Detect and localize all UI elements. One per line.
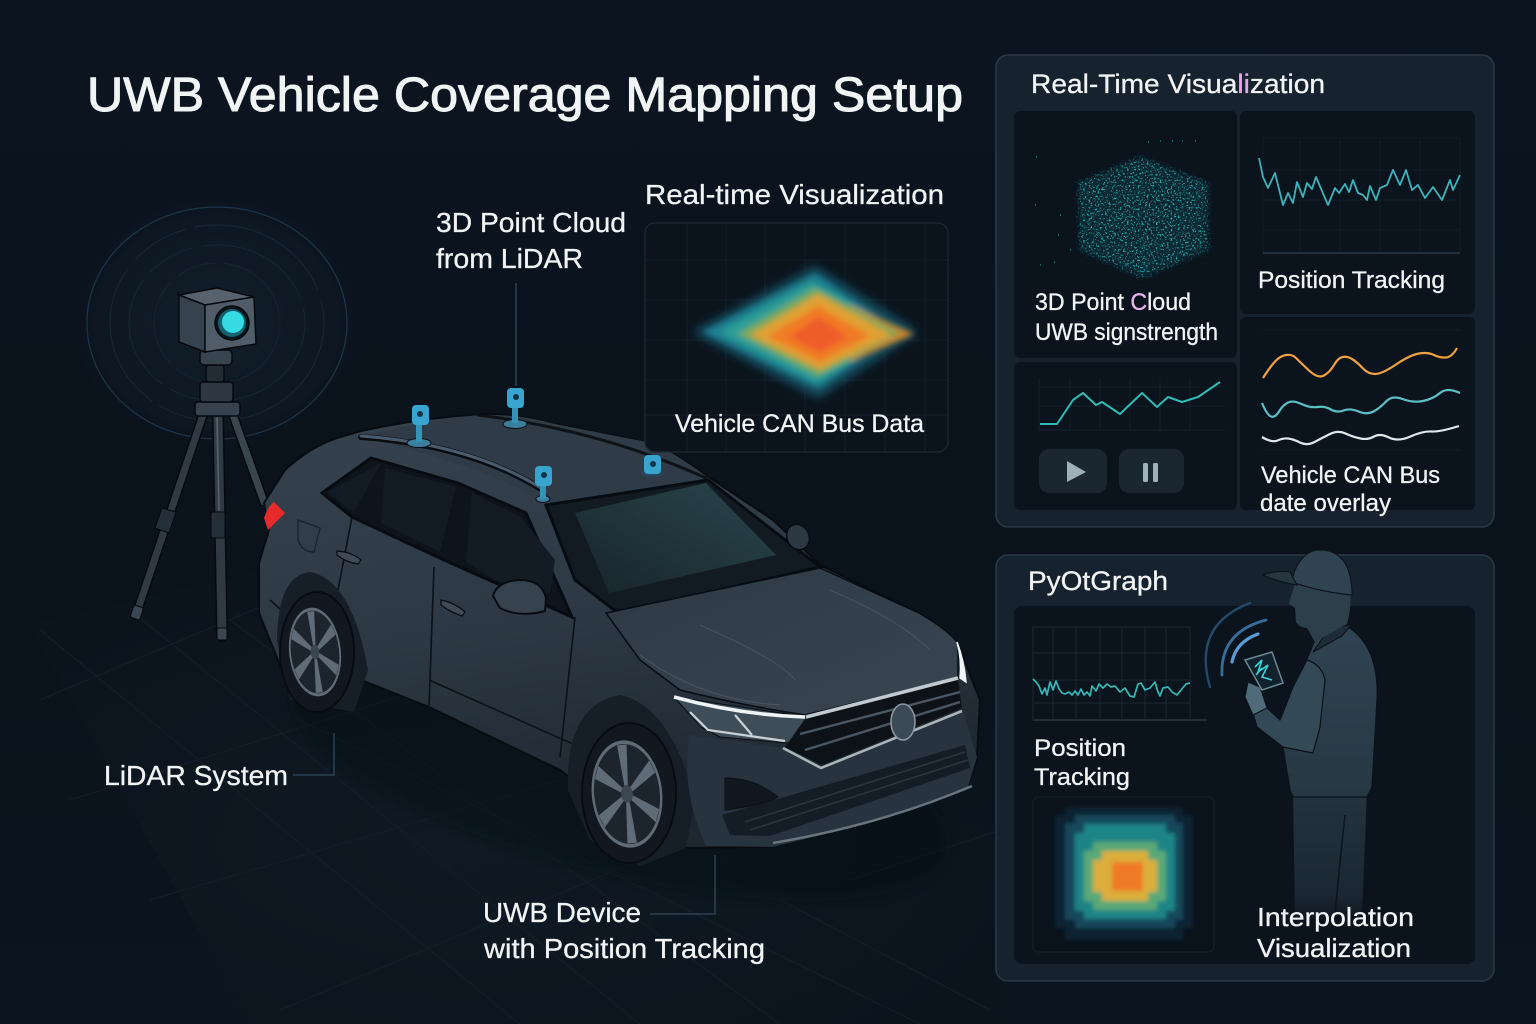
- hood creases: [640, 590, 930, 705]
- diamond heatmap: [692, 266, 918, 398]
- panel: vehicle CAN bus heatmap: [645, 223, 948, 452]
- front wheel: [568, 695, 695, 866]
- hood edge highlight: [957, 642, 966, 682]
- rear wheel: [277, 572, 368, 712]
- panel: PyOtGraph: [996, 550, 1494, 981]
- interpolation heatmap: [1033, 797, 1214, 952]
- inner panel: [1014, 606, 1475, 964]
- label: UWB device: [483, 897, 765, 964]
- position tracking caption: [1034, 735, 1130, 791]
- label: real-time visualization: Real-time Visualization: [645, 179, 944, 210]
- legs: [1293, 790, 1367, 920]
- label: 3D point cloud from LiDAR: from LiDAR: [436, 243, 583, 274]
- lower grille: [722, 745, 970, 836]
- phone: [1245, 652, 1283, 690]
- orange trace: [1263, 348, 1457, 378]
- position chart: [1033, 627, 1207, 720]
- head: [1289, 583, 1351, 642]
- overlay caption: Vehicle CAN Bus: [1261, 462, 1440, 489]
- door lines and sills: [270, 517, 575, 757]
- hand: [1245, 682, 1267, 715]
- panel caption: Vehicle CAN Bus Data: [675, 410, 924, 438]
- label: UWB device: with Position Tracking: [483, 933, 765, 964]
- panel background: [996, 555, 1494, 981]
- cell: position tracking: [1240, 111, 1475, 314]
- title: UWB Vehicle Coverage Mapping Setup: [87, 69, 963, 122]
- lower grille slats: [745, 752, 968, 830]
- cap brim: [1263, 571, 1297, 585]
- windshield reflection: [575, 483, 776, 593]
- sensor: front right: [641, 455, 663, 476]
- cap: [1292, 550, 1352, 595]
- leader line: LiDAR system: [293, 733, 334, 775]
- hood: [606, 568, 958, 715]
- roof: [361, 415, 708, 505]
- tail light: [264, 502, 285, 530]
- floor grid: [30, 570, 1010, 1024]
- white trace: [1262, 426, 1459, 444]
- signal arcs: [1206, 603, 1266, 687]
- interpolation caption: Interpolation: [1257, 902, 1414, 932]
- leader line: UWB device: [650, 855, 715, 914]
- sensor: front left: [535, 466, 552, 502]
- fog vent: [725, 778, 778, 810]
- far mirror: [783, 521, 813, 553]
- windshield: [546, 480, 820, 613]
- panel heading: PyOtGraph: [1028, 566, 1168, 596]
- panel background: [996, 55, 1494, 527]
- teal trace: [1262, 390, 1460, 417]
- LiDAR system on tripod: [65, 191, 369, 640]
- point cloud: [1078, 157, 1208, 278]
- position tracking caption: Tracking: [1034, 764, 1130, 791]
- position tracking caption: Position: [1034, 735, 1126, 762]
- person with phone: [1206, 550, 1377, 920]
- label: LiDAR system: LiDAR System: [104, 760, 288, 791]
- panel heading: Real-Time Visua lization: [1031, 69, 1325, 99]
- label: 3D point cloud from LiDAR: 3D Point Cloud: [436, 207, 626, 238]
- leader line: point cloud to sensor: [515, 283, 517, 386]
- signal rings: [65, 191, 369, 455]
- tripod legs: [130, 415, 264, 640]
- pause button: [1119, 449, 1184, 493]
- stray points: [1035, 141, 1196, 265]
- cell: signal chart and playback controls: [1014, 362, 1237, 510]
- label: 3D point cloud from LiDAR: [436, 207, 626, 274]
- interpolation caption: [1257, 902, 1414, 963]
- panel: real-time visualization: [996, 55, 1494, 527]
- collar: [1313, 624, 1352, 652]
- car ground shadow: [265, 586, 975, 954]
- cell: CAN bus overlay: date overlay: [1260, 490, 1391, 517]
- point cloud haze: [1078, 157, 1208, 278]
- tripod head: [195, 350, 240, 416]
- door handles: [337, 551, 465, 616]
- tracking line chart: [1259, 158, 1460, 205]
- lower lip: [773, 786, 972, 843]
- tracking caption: Position Tracking: [1258, 267, 1445, 294]
- side window surround: [322, 458, 572, 617]
- fuel cap: [298, 520, 320, 552]
- line chart: [1040, 382, 1220, 424]
- cell: CAN bus overlay: [1240, 317, 1475, 517]
- sensor: rear right: [503, 388, 527, 428]
- headlight: [674, 697, 812, 743]
- car body: [259, 414, 980, 848]
- panel frame: [645, 223, 948, 452]
- side mirror: [493, 580, 546, 614]
- point cloud caption: 3D Point Cloud: [1035, 289, 1191, 316]
- cell: point cloud: [1014, 111, 1237, 358]
- grille badge: [891, 704, 915, 740]
- LiDAR camera box: [179, 288, 256, 352]
- torso: [1283, 626, 1377, 797]
- side windows: [327, 463, 555, 593]
- car: [259, 388, 980, 954]
- roof rails: [361, 415, 706, 489]
- cell: point cloud: UWB signstrength: [1035, 319, 1218, 346]
- sensor: rear left: [407, 405, 431, 448]
- noisy signal: [1033, 679, 1190, 697]
- interpolation caption: Visualization: [1257, 933, 1411, 963]
- label: UWB device: UWB Device: [483, 897, 641, 928]
- front bumper: [687, 712, 977, 847]
- play button: [1039, 449, 1107, 493]
- arm: [1253, 660, 1325, 753]
- grille: [783, 678, 962, 768]
